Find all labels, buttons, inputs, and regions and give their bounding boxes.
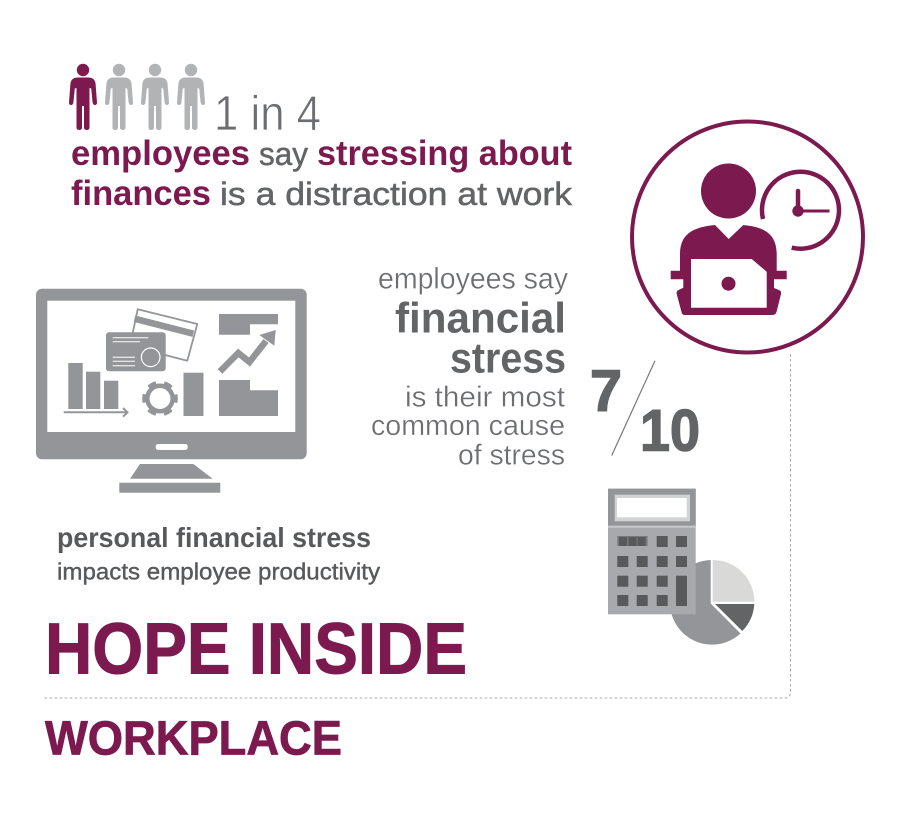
numerator: 7 (590, 359, 622, 424)
calculator head (608, 489, 696, 526)
icon: grey person 2 (105, 64, 133, 130)
line: common cause: common cause (371, 410, 565, 442)
line 1 connector: say (259, 136, 308, 172)
calculator keys (617, 536, 687, 606)
stepped block bottom (219, 380, 278, 416)
line: of stress: of stress (458, 440, 565, 472)
icon: worker with laptop and clock in circle (632, 122, 863, 352)
pie light slice (713, 560, 754, 602)
gear icon (144, 382, 176, 414)
back credit card (130, 309, 197, 361)
denominator: 10 (640, 398, 700, 464)
laptop (691, 259, 767, 308)
separator (608, 526, 696, 528)
line 2 remainder: is a distraction at work (220, 176, 573, 212)
trend arrow (220, 330, 276, 372)
statistic: 7 out of 10 (590, 359, 700, 464)
icon: row of four people (69, 64, 205, 130)
display (617, 498, 687, 517)
pie large slice (670, 560, 740, 645)
title: HOPE INSIDE: HOPE INSIDE (45, 609, 467, 689)
clock (762, 172, 839, 249)
monitor screen (47, 301, 295, 432)
stepped block top (219, 314, 278, 335)
line: is their most: is their most (405, 382, 565, 414)
text: impacts employee productivity: impacts employee productivity (57, 558, 381, 584)
line 1 emphasis: employees (71, 134, 250, 173)
line: financial: financial (395, 295, 566, 343)
display frame (615, 495, 690, 521)
bar chart icon (64, 363, 128, 417)
circle outline (632, 122, 863, 352)
icon: grey person 3 (141, 64, 169, 130)
line 1 emphasis end: stressing about (317, 134, 572, 173)
text block: financial stress most common cause (371, 262, 568, 472)
statistic: 1 in 4: 1 in 4 (214, 87, 321, 141)
icon: calculator (608, 489, 696, 614)
line 2 emphasis: finances (71, 174, 211, 213)
monitor bezel (36, 289, 307, 459)
text: personal financial stress: personal financial stress (57, 522, 371, 553)
tall block (184, 373, 204, 416)
subtitle: WORKPLACE: WORKPLACE (45, 712, 342, 765)
icon: grey person 4 (177, 64, 205, 130)
icon: pie chart (670, 560, 754, 645)
line: employees say: employees say (378, 262, 568, 295)
monitor stand (130, 464, 213, 479)
calculator body (608, 489, 696, 614)
front card (106, 332, 166, 371)
worker head (701, 164, 756, 218)
laptop logo (722, 277, 736, 291)
dotted frame line (43, 354, 790, 698)
worker body (671, 225, 787, 315)
icon: highlighted person (69, 64, 97, 130)
text block: employees stressing about finances (71, 134, 573, 213)
line: stress: stress (450, 335, 566, 383)
fraction slash (612, 361, 655, 456)
monitor base (119, 483, 220, 493)
pie dark slice (715, 604, 754, 631)
monitor button (156, 444, 188, 450)
icon: computer monitor with finance graphics (36, 289, 307, 493)
